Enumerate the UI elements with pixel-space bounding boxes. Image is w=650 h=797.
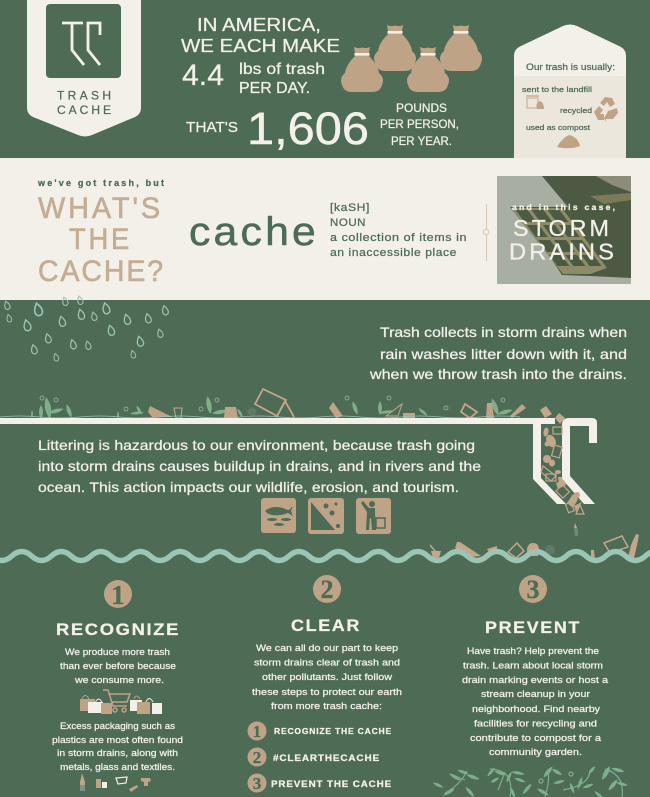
step number 2: 2 [320,575,334,604]
icon: wildlife fish [261,498,296,533]
storm drain photo [497,176,631,284]
storm drain photo: DRAINS [509,238,617,264]
text: produce more trash [60,647,176,685]
storm drain photo: and in this case, [512,202,615,212]
step list: RECOGNIZE THE CACHE [274,726,392,736]
panel: what our trash is: used as compost [526,123,591,132]
icon: litter types [80,773,151,792]
headline stats: lbs of trash [239,61,325,78]
storm drain outline logo [0,418,597,504]
text: clear intro [252,643,402,711]
heading: what's the cache: WHAT'S [38,192,163,225]
text: produce more trash: than ever before because [60,661,176,671]
headline stats [181,14,459,154]
text: prevent: facilities for recycling and [474,718,597,728]
text: prevent: Have trash? Help prevent the [467,646,599,656]
text: excess packaging [52,721,183,772]
step list: 1 [253,722,261,741]
step list: 2 [253,748,261,767]
text: how trash collects: Trash collects in storm drains when [380,324,627,340]
text: clear intro: storm drains clear of trash and [254,658,400,668]
definition: [kaSH] [330,202,370,214]
step number 1 [104,580,132,610]
column: recognize [52,580,183,792]
icon: rain drops [3,295,169,362]
text: littering hazards: ocean. This action impacts our wildlife, erosion, and tourism. [38,479,459,495]
step number 1: 1 [111,580,125,610]
definition: an inaccessible place [330,247,457,259]
heading: recognize: RECOGNIZE [56,621,180,639]
logo badge: CACHE [57,103,111,117]
text: prevent: community garden. [489,747,582,757]
debris along the drain line [0,0,526,419]
headline stats: POUNDS [396,101,447,115]
definition: a collection of items in [330,232,467,244]
step list [248,722,392,793]
headline stats: IN AMERICA, [197,14,321,35]
headline stats: PER YEAR. [391,134,452,148]
heading: what's the cache: THE [69,223,132,256]
text: littering hazards: Littering is hazardous to our environment, because trash going [38,437,475,453]
text: excess packaging: plastics are most often found [52,735,183,745]
text: excess packaging: metals, glass and textiles. [60,762,175,772]
heading: prevent: PREVENT [485,619,581,637]
step number 3 [519,575,547,604]
text: prevent: trash. Learn about local storm [463,660,603,670]
panel: what our trash is [514,24,626,158]
headline stats: WE EACH MAKE [181,35,340,56]
icon: trash falling through drain [540,406,584,536]
column: clear [248,575,402,793]
text: how trash collects [369,324,627,382]
step list: #CLEARTHECACHE [273,753,380,764]
text: how trash collects: rain washes litter down with it, and [380,346,627,362]
debris on the water wave [430,534,639,561]
icon: leafy branches [432,765,628,797]
word: cache: cache [189,210,319,254]
heading: what's the cache: CACHE? [38,255,165,288]
text: prevent: drain marking events or host a [462,675,608,685]
text: prevent [462,646,608,757]
band: what's the cache [0,158,650,300]
text: how trash collects: when we throw trash into the drains. [369,366,627,382]
text: littering hazards [38,437,481,495]
text: clear intro: these steps to protect our earth [252,687,402,697]
heading: what's the cache [37,178,165,288]
column: prevent [462,575,608,757]
storm drain photo: STORM [513,215,612,241]
text: excess packaging: Excess packaging such as [60,721,176,731]
headline stats: PER PERSON, [380,117,459,131]
icon: recycle [594,97,618,122]
text: clear intro: other pollutants. Just follow [262,672,393,682]
step number 2 [313,575,341,604]
step number 3: 3 [526,575,540,604]
panel: what our trash is: sent to the landfill [522,85,592,94]
text: produce more trash: we consume more. [74,675,164,685]
icon: shopping bags and cart [80,690,162,714]
text: produce more trash: We produce more trash [65,647,170,657]
text: littering hazards: into storm drains causes buildup in drains, and in rivers and the [38,458,481,474]
heading: clear: CLEAR [291,617,361,635]
icon: tourism [356,498,391,534]
wave line [0,552,650,560]
icon: landfill can [526,95,544,109]
step list: PREVENT THE CACHE [271,779,392,789]
panel: what our trash is: Our trash is usually: [526,62,615,72]
headline stats: 4.4 [182,59,224,92]
logo badge [27,0,141,136]
text: prevent: stream cleanup in your [481,689,590,699]
text: prevent: contribute to compost for a [470,733,601,743]
text: clear intro: from more trash cache: [271,701,382,711]
logo badge: TRASH [57,88,111,102]
panel: what our trash is: recycled [560,106,592,115]
definition [330,202,467,259]
step list: 3 [253,774,261,793]
icon: trash bags [341,25,482,92]
icon: erosion [308,498,344,534]
definition: NOUN [330,217,366,229]
icon: compost pile [557,135,580,148]
headline stats: 1,606 [247,103,369,154]
text: prevent: neighborhood. Find nearby [472,704,601,714]
headline stats: PER DAY. [239,80,310,97]
text: clear intro: We can all do our part to keep [256,643,398,653]
heading: what's the cache: we've got trash, but [37,178,164,188]
text: excess packaging: in storm drains, along with [57,748,178,758]
headline stats: THAT'S [186,120,238,136]
